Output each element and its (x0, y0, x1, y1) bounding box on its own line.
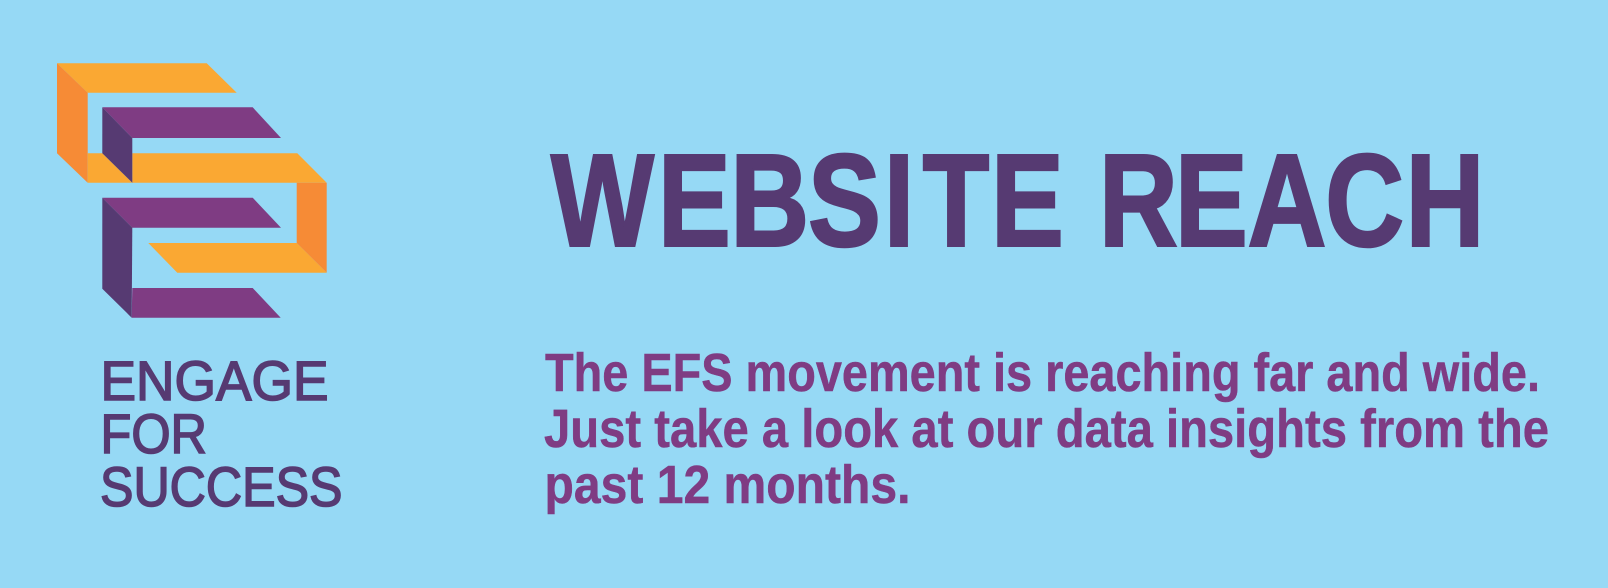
middle purple bar (102, 198, 281, 228)
left orange side (57, 63, 88, 183)
intro paragraph (544, 343, 1549, 515)
title: WEBSITE REACH (551, 127, 1484, 274)
intro paragraph: past 12 months. (544, 455, 910, 515)
upper dark purple side (102, 107, 132, 183)
middle orange bar (132, 153, 327, 183)
logo wordmark: ENGAGE (100, 349, 328, 412)
logo mark: interlocking EFS ribbon (57, 63, 327, 318)
logo wordmark: FOR (100, 402, 207, 465)
lower orange bar (148, 243, 327, 273)
logo wordmark: SUCCESS (100, 455, 342, 518)
right orange side (297, 183, 327, 273)
logo wordmark (100, 349, 342, 518)
upper purple bar (102, 107, 281, 138)
bottom purple bar (132, 288, 281, 318)
top orange bar (57, 63, 237, 93)
middle orange bar left piece (88, 153, 132, 183)
lower dark purple side (102, 198, 132, 318)
